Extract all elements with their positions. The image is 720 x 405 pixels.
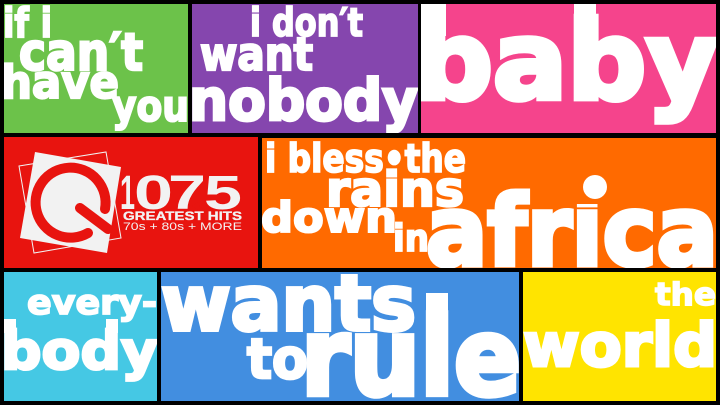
lyric: nobody: nobody [189, 68, 418, 134]
logo: station number [120, 167, 242, 220]
logo: Q ring [36, 168, 106, 238]
logo: station number: 0 [134, 167, 173, 220]
panel: the world [523, 272, 717, 401]
lyric: body: body [1, 321, 158, 382]
panel: baby [414, 0, 718, 133]
lyric: baby: baby [414, 0, 718, 124]
logo: station number: 7 [168, 167, 206, 220]
logo: Q tail [80, 208, 108, 229]
lyric: to: to [247, 327, 308, 391]
panel: if i can't have you [1, 0, 189, 133]
lyric: have: have [1, 56, 119, 109]
lyric: i bless the: i bless•the [265, 137, 466, 182]
panel: i bless the rains down in africa [262, 138, 716, 268]
logo: tilted white square [20, 152, 121, 253]
lyric: can't: can′t [19, 23, 143, 83]
lyric: you: you [112, 82, 189, 132]
logo: decades: 70s + 80s + MORE [123, 221, 242, 233]
panel: Q107.5 logo [4, 137, 258, 268]
lyric: the: the [655, 277, 716, 313]
logo: rewind arrows [192, 202, 205, 210]
lyric: rains: rains [326, 162, 464, 218]
lyric: i don't: i don′t [250, 1, 363, 46]
logo: tilted outline square [19, 152, 121, 253]
logo: greatest hits: GREATEST HITS [123, 211, 242, 223]
panel: i don't want nobody [189, 1, 418, 134]
lyric: world: world [523, 311, 717, 381]
lyric: if i: if i [3, 0, 52, 47]
logo: station number: 1 [120, 167, 135, 220]
lyric: in: in [393, 217, 429, 260]
lyric: every-: every- [27, 283, 157, 323]
lyric: wants: wants [161, 260, 416, 349]
logo: station number: 5 [204, 167, 242, 220]
lyric: want: want [200, 28, 313, 81]
lyric: down: down [261, 193, 397, 242]
panel: everybody [1, 272, 158, 401]
panel: wants to rule [161, 272, 519, 401]
